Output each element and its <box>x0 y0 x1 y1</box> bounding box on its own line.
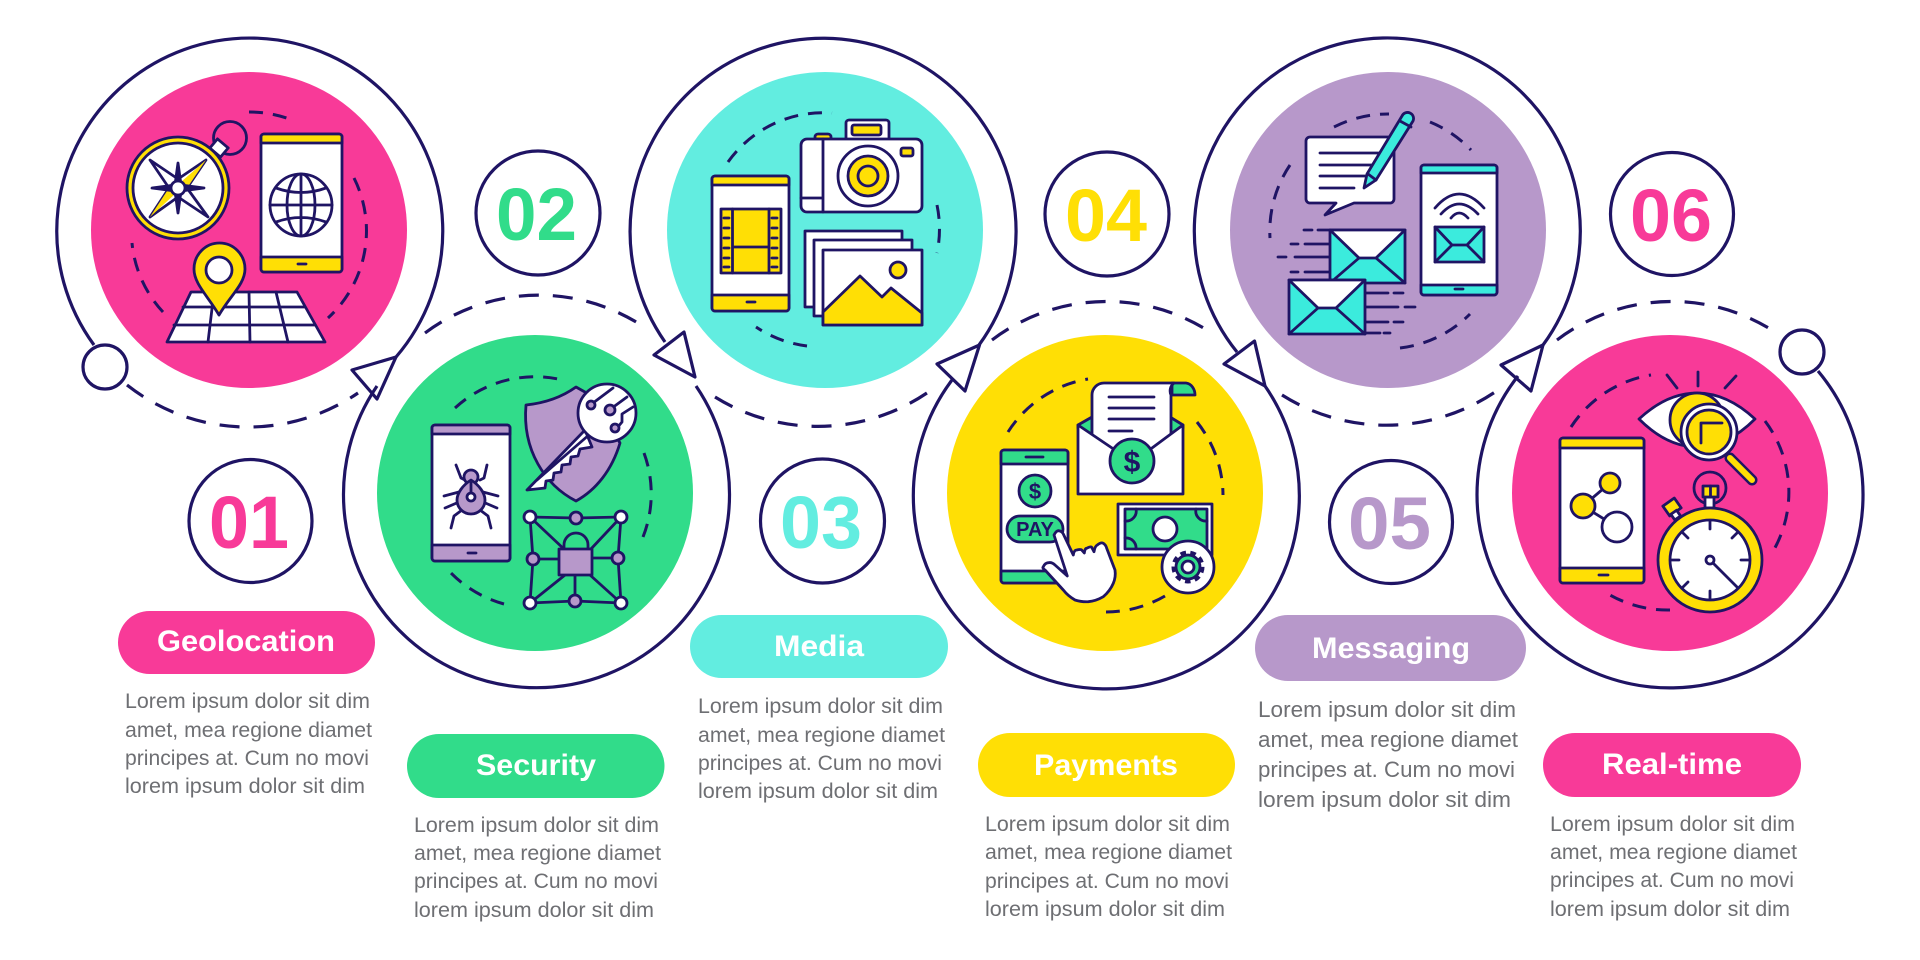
description 2: amet, mea regione diamet <box>414 841 661 865</box>
label pill Messaging: Messaging <box>1312 632 1470 665</box>
description 2: lorem ipsum dolor sit dim <box>414 898 654 922</box>
description 4: Lorem ipsum dolor sit dim <box>985 812 1230 836</box>
description 1: Lorem ipsum dolor sit dim <box>125 689 370 713</box>
number badge 06 <box>1610 152 1734 276</box>
number badge 01: 01 <box>209 481 289 564</box>
icon: banknote with gear <box>1118 504 1214 593</box>
icon: phone with film <box>712 176 789 311</box>
label pill Security: Security <box>476 749 596 782</box>
panel: step 2 security <box>344 151 730 922</box>
icon: stopwatch <box>1658 472 1762 612</box>
ring 5 <box>1194 38 1580 425</box>
disc 4 <box>947 335 1263 651</box>
icon: flying envelopes <box>1278 230 1415 334</box>
icon: eye with magnifier <box>1639 372 1755 480</box>
number badge 05: 05 <box>1348 482 1431 565</box>
description 3 <box>698 694 945 803</box>
number badge 04: 04 <box>1065 174 1147 257</box>
icon: compass <box>127 122 246 239</box>
label pill Geolocation <box>118 611 375 674</box>
description 5: amet, mea regione diamet <box>1258 727 1519 752</box>
description 2 <box>414 813 661 922</box>
description 1 <box>125 689 372 798</box>
panel: step 3 media <box>630 38 1016 803</box>
description 4: amet, mea regione diamet <box>985 840 1232 864</box>
icon: shield and key <box>526 384 636 501</box>
end marker <box>1780 330 1824 374</box>
description 2: Lorem ipsum dolor sit dim <box>414 813 659 837</box>
start marker <box>83 345 127 389</box>
description 1: lorem ipsum dolor sit dim <box>125 774 365 798</box>
inner dashed arcs 6 <box>1571 375 1789 610</box>
ring 6 <box>1477 301 1863 688</box>
label pill Security <box>407 734 664 798</box>
description 6 <box>1550 812 1797 921</box>
icon: camera <box>801 120 922 212</box>
inner dashed arcs 2 <box>451 377 651 604</box>
label pill Media: Media <box>774 630 864 663</box>
inner dashed arcs 4 <box>1008 379 1223 612</box>
label pill Real-time: Real-time <box>1602 748 1742 781</box>
icon: invoice envelope <box>1078 383 1195 494</box>
label pill Payments: Payments <box>1034 749 1178 782</box>
label pill Payments <box>978 733 1235 797</box>
number badge 01 <box>189 460 312 582</box>
label pill Media <box>690 615 948 678</box>
disc 6 <box>1512 335 1828 651</box>
panel: step 4 payments <box>913 152 1299 921</box>
description 6: Lorem ipsum dolor sit dim <box>1550 812 1795 836</box>
description 5: principes at. Cum no movi <box>1258 757 1515 782</box>
icon: network lock <box>524 511 627 609</box>
inner dashed arcs 5 <box>1270 114 1471 348</box>
description 5: lorem ipsum dolor sit dim <box>1258 787 1511 812</box>
description 3: lorem ipsum dolor sit dim <box>698 779 938 803</box>
arrow 4 <box>1224 341 1265 386</box>
icon: map with pin <box>167 243 325 342</box>
icon: phone with bug <box>432 425 510 561</box>
description 3: amet, mea regione diamet <box>698 723 945 747</box>
description 6: principes at. Cum no movi <box>1550 868 1794 892</box>
panel: step 5 messaging <box>1194 38 1580 812</box>
icon: phone with pay button: PAY <box>1016 519 1055 541</box>
icon: phone with share nodes <box>1560 438 1644 583</box>
icon: speech bubble and pencil <box>1306 112 1414 215</box>
description 3: principes at. Cum no movi <box>698 751 942 775</box>
icon: pointing hand <box>1043 531 1115 602</box>
disc 2 <box>377 335 693 651</box>
icon: photo stack <box>805 231 922 325</box>
inner dashed arcs 3 <box>728 113 939 346</box>
description 4: principes at. Cum no movi <box>985 869 1229 893</box>
number badge 06: 06 <box>1630 174 1712 257</box>
ring 1 <box>57 38 443 427</box>
number badge 05 <box>1330 460 1452 584</box>
number badge 02: 02 <box>496 173 577 256</box>
description 4 <box>985 812 1232 921</box>
number badge 03: 03 <box>780 481 862 564</box>
label pill Messaging <box>1255 615 1526 681</box>
description 6: lorem ipsum dolor sit dim <box>1550 897 1790 921</box>
description 3: Lorem ipsum dolor sit dim <box>698 694 943 718</box>
description 5 <box>1258 697 1519 812</box>
number badge 02 <box>476 151 600 275</box>
description 1: amet, mea regione diamet <box>125 718 372 742</box>
icon: invoice envelope: $ <box>1124 446 1141 479</box>
description 6: amet, mea regione diamet <box>1550 840 1797 864</box>
arrow 2 <box>654 332 695 377</box>
number badge 04 <box>1045 152 1169 276</box>
ring 2 <box>344 295 730 688</box>
arrow 1 <box>352 357 396 399</box>
disc 1 <box>91 72 407 388</box>
icon: phone with globe <box>261 134 342 272</box>
arrow 5 <box>1501 345 1543 391</box>
disc 5 <box>1230 72 1546 388</box>
panel: step 1 geolocation <box>57 38 443 798</box>
description 2: principes at. Cum no movi <box>414 869 658 893</box>
label pill Real-time <box>1543 733 1801 797</box>
panel: step 6 real-time <box>1477 152 1863 921</box>
label pill Geolocation: Geolocation <box>157 625 335 658</box>
disc 3 <box>667 72 983 388</box>
icon: phone with pay button: $ <box>1029 479 1041 504</box>
ring 3 <box>630 38 1016 426</box>
inner dashed arcs 1 <box>132 112 366 318</box>
description 4: lorem ipsum dolor sit dim <box>985 897 1225 921</box>
description 1: principes at. Cum no movi <box>125 746 369 770</box>
ring 4 <box>913 301 1299 689</box>
arrow 3 <box>937 345 980 391</box>
number badge 03 <box>760 459 884 583</box>
icon: phone with pay button <box>1001 450 1068 583</box>
description 5: Lorem ipsum dolor sit dim <box>1258 697 1516 722</box>
icon: phone with wifi mail <box>1421 165 1497 295</box>
